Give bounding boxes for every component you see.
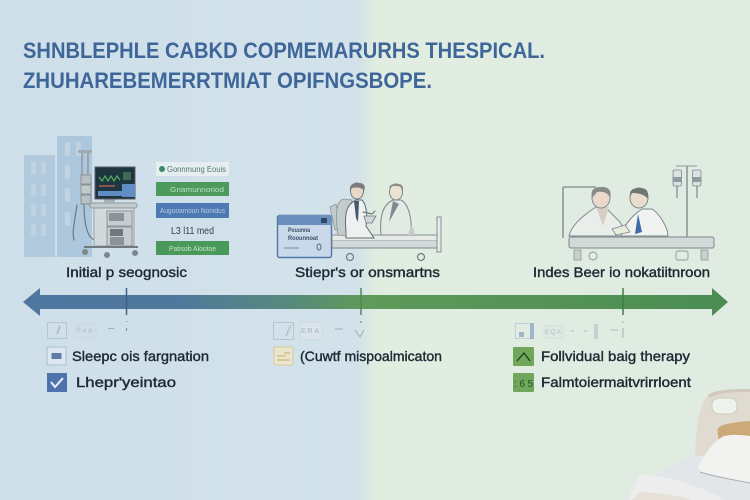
heading: stage two: Stiepr's or onsmartns — [295, 264, 440, 280]
illustration: patient record card: Pouunna — [288, 228, 311, 234]
info cards — [156, 162, 229, 255]
heading: stage three: Indes Beer io nokatiitnroon — [533, 264, 710, 280]
list item: stage three, first: Follvidual baig therapy — [541, 348, 690, 364]
list item: stage three, second: :65 — [514, 379, 533, 390]
list item: stage one, second: Lhepr'yeintao — [76, 374, 176, 390]
list item: stage two: (Cuwtf mispoalmicaton — [300, 348, 442, 364]
illustration: hospital buildings — [24, 136, 92, 257]
title: SHNBLEPHLE CABKD COPMEMARURHS THESPICAL. — [23, 38, 545, 63]
faint step row: stage two — [274, 321, 364, 340]
illustration: patient record card — [278, 215, 332, 258]
illustration: two figures at bedside — [563, 187, 668, 238]
illustration: patient record card: Roounnoat — [288, 236, 318, 242]
faint step row: stage three: EQA — [545, 329, 562, 336]
illustration: hospital bed corner — [625, 389, 750, 500]
illustration: doctor and patient on bed — [330, 183, 441, 260]
title — [23, 38, 545, 93]
list item: stage three, first — [513, 347, 690, 366]
list item: stage one, first: Sleepc ois fargnation — [72, 348, 209, 364]
faint step row: stage one — [48, 321, 126, 338]
info cards: Gnamunnoriod — [170, 185, 224, 194]
info cards: Auguoamoun Nonidus — [160, 206, 225, 215]
faint step row: stage two: ERA — [301, 328, 319, 335]
list item: stage one, second — [47, 373, 176, 392]
info cards: Patisob Alootoe — [169, 244, 216, 253]
faint step row: stage three — [516, 321, 623, 339]
title: ZHUHAREBEMERRTMIAT OPIFNGSBOPE. — [23, 68, 432, 93]
info cards: Gonnmung Eouis — [167, 165, 226, 174]
list item: stage three, second — [513, 373, 691, 392]
info cards: L3 l11 med — [171, 225, 214, 237]
illustration: hospital bed frame — [569, 237, 714, 260]
heading: stage one: Initial p seognosic — [66, 264, 187, 280]
illustration: endoscopy cart with monitor — [73, 150, 138, 258]
illustration: IV drip stand — [673, 166, 701, 237]
timeline arrow — [23, 288, 728, 316]
list item: stage three, second: Falmtoiermaitvrirrloent — [541, 374, 691, 390]
faint step row: stage one: 0ap — [77, 327, 92, 334]
